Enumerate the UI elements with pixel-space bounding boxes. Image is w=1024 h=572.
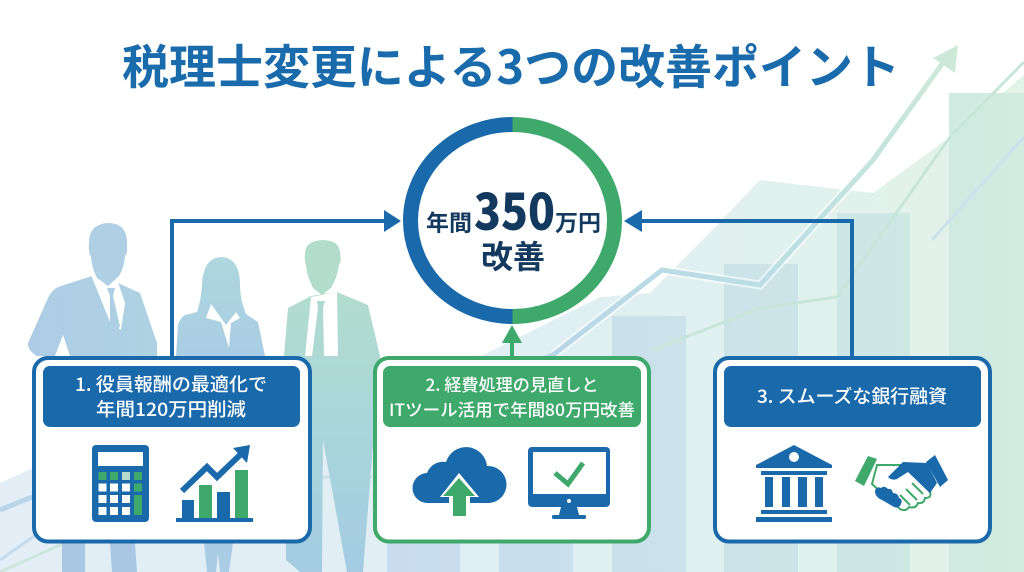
panel 1 heading: 1. 役員報酬の最適化で xyxy=(75,371,267,397)
panel 1 heading: 年間120万円削減 xyxy=(96,396,247,422)
arrow: panel 3 to center xyxy=(624,210,852,356)
arrow: panel 2 to center xyxy=(502,325,522,357)
center ring callout xyxy=(410,124,616,318)
icon: bank xyxy=(756,445,832,522)
center ring callout: 350 xyxy=(474,173,555,245)
icon: cloud upload xyxy=(412,447,507,518)
panel 2 heading: 2. 経費処理の見直しと xyxy=(426,371,598,396)
background: trend arrow head xyxy=(933,45,958,73)
panel 2 heading: ITツール活用で年間80万円改善 xyxy=(389,396,635,421)
amount text: 年間 xyxy=(426,206,472,238)
background: bar chart xyxy=(387,93,1024,572)
panel 2: expenses and IT xyxy=(375,358,649,542)
arrow: panel 1 to center xyxy=(172,210,401,356)
silhouette: woman xyxy=(176,257,265,572)
silhouette: man right xyxy=(284,240,380,572)
title: 税理士変更による3つの改善ポイント xyxy=(122,29,900,98)
panel 3: bank financing xyxy=(715,358,990,542)
silhouette: man left xyxy=(28,223,157,572)
icon: handshake xyxy=(855,455,948,510)
panel 3 heading: 3. スムーズな銀行融資 xyxy=(757,383,947,409)
improvement text: 改善 xyxy=(481,232,545,278)
panel 1: executive pay xyxy=(34,358,310,542)
icon: monitor with check xyxy=(528,447,610,519)
icon: rising bar chart xyxy=(176,445,253,522)
center ring callout: 万円 xyxy=(555,206,601,238)
icon: calculator xyxy=(92,445,149,522)
